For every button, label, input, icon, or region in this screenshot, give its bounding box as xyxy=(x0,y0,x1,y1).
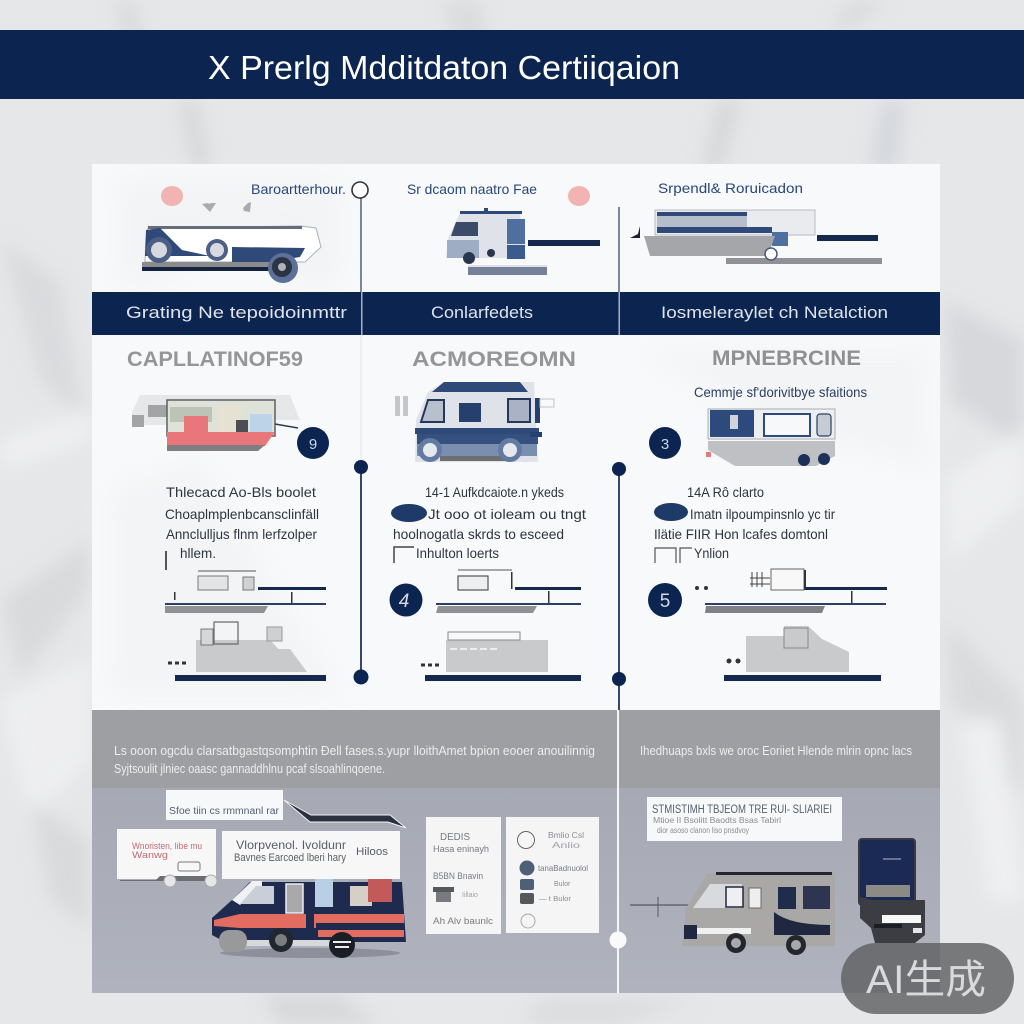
card D: legend: Hasa eninayh xyxy=(433,844,489,854)
icon: top vehicle 2 xyxy=(446,208,600,275)
chart: section 2 upper diagram xyxy=(436,570,581,613)
title banner xyxy=(0,30,1024,99)
text block: lower left note: Ls ooon ogcdu clarsatbgastqsomphtin Ɖell ƭases.s.yupr lloithAmet bpion eooer anouilinnig xyxy=(114,743,595,758)
column divider lines xyxy=(361,198,619,710)
text block: section 2: 14-1 Aufkdcaiote.n ykeds xyxy=(425,484,564,500)
label: strip column 2: Conlarfedets xyxy=(431,303,533,322)
heading: column 2 top: Sr dcaom naatro Fae xyxy=(407,181,537,197)
card D: legend xyxy=(426,817,501,934)
chart: section 3 lower diagram xyxy=(724,626,881,681)
heading: column 1 top: Baroartterhour. xyxy=(251,181,346,197)
text block: section 1: Choaplmplenbcansclinfäll xyxy=(165,506,319,522)
callout: card B: Wnoristen, Iibe mu xyxy=(132,841,202,851)
chart: section 1 lower diagram xyxy=(168,622,326,681)
callout: card F: Mtioe II Bsolitt Baodts Bsas Tabirl xyxy=(653,816,781,825)
card D: legend: B5BN Bnavin xyxy=(433,871,483,881)
navy label strip xyxy=(92,292,940,335)
text block: section 3: Ynlion xyxy=(694,545,729,561)
text block: section 2: Inhulton loerts xyxy=(416,545,499,561)
subheading: section 3: Cemmje sf'dorivitbye sfaitions xyxy=(694,384,867,400)
label: strip column 3: Iosmeleraylet ch Netalction xyxy=(661,303,888,322)
text block: lower left note xyxy=(114,743,595,776)
heading: section 1: CAPLLATINOF59 xyxy=(127,348,303,371)
number badge: 9: 9 xyxy=(309,436,317,453)
callout: card C: Vlorpvenol. Ivoldunr xyxy=(236,838,346,852)
icon: cutaway camper xyxy=(132,395,300,451)
label: strip column 1: Grating Ne tepoidoinmttr xyxy=(126,303,347,322)
panel: lower section xyxy=(92,710,940,993)
icon: black device xyxy=(859,839,925,943)
text block: section 3: 14A Rô clarto xyxy=(687,484,764,500)
callout: card B: Wanwg xyxy=(132,850,168,860)
chart: section 3 upper diagram xyxy=(695,569,887,613)
number badge: 3: 3 xyxy=(661,436,669,453)
callout: card B xyxy=(117,829,217,887)
callout: card C: Hiloos xyxy=(356,846,389,858)
text block: section 2 xyxy=(391,484,586,563)
card E: legend: — t Bulor xyxy=(539,896,572,903)
icon: pink marker left xyxy=(161,186,183,206)
callout: card F: dior asoso clanon liso pnsdvoy xyxy=(657,826,749,835)
callout: card F xyxy=(647,797,842,841)
timeline dots xyxy=(354,460,626,686)
text block: section 1 xyxy=(165,484,319,570)
icon: top vehicle 1 xyxy=(142,226,321,283)
text block: lower left note: Syjtsoulit jlniec oaasc gannaddhlnu pcaf slsoahlinqoene. xyxy=(114,761,385,776)
icon: top vehicle 3 xyxy=(630,210,882,264)
card E: legend: Bulor xyxy=(554,881,571,888)
title: X Prerlg Mdditdaton Certiiqaion xyxy=(208,49,680,86)
text block: section 1: hllem. xyxy=(180,545,216,561)
callout: card A xyxy=(166,790,283,820)
card E: legend: tanaBadnuolol xyxy=(538,864,588,873)
icon: van roof xyxy=(284,800,406,828)
timeline dot: lower xyxy=(610,932,626,948)
text block: section 2: hoolnogatla skrds to esceed xyxy=(393,526,564,542)
chart: section 2 lower diagram xyxy=(421,632,581,681)
card D: legend: DEDIS xyxy=(440,832,470,843)
icon: front camper van xyxy=(395,382,554,462)
number badge: 4 xyxy=(390,584,422,616)
number badge: 5: 5 xyxy=(660,591,670,612)
callout: card C: Bavnes Earcoed lberi hary xyxy=(234,852,346,864)
number badge: 5 xyxy=(648,583,682,617)
text block: section 3 xyxy=(654,484,835,563)
callout: card C xyxy=(222,831,400,879)
card E: legend: Bmlio Csl xyxy=(548,831,584,840)
badge: AI generated xyxy=(841,943,1014,1014)
number badge: 4: 4 xyxy=(399,591,409,612)
text block: lower right note: Ihedhuaps bxls we oroc Eoriiet Hlende mlrin opnc lacs xyxy=(640,743,912,758)
badge: AI generated: AI生成 xyxy=(866,958,986,1002)
icon: side camper xyxy=(706,409,835,466)
card E: legend xyxy=(506,817,599,933)
heading: section 2: ACMOREOMN xyxy=(412,348,576,371)
icon: red camper van xyxy=(212,879,406,958)
callout: card A: Sfoe tiin cs rmmnanl rar xyxy=(169,806,280,817)
card D: legend: Ah Alv baunlc xyxy=(433,916,494,926)
icon: grey camper van xyxy=(630,872,835,955)
heading: section 3: MPNEBRCINE xyxy=(712,347,861,370)
card D: legend: Iillaio xyxy=(462,892,478,899)
icon: pink marker right xyxy=(568,186,590,206)
heading: column 3 top: Srpendl& Roruicadon xyxy=(658,180,803,196)
text block: section 3: Ilätie FIIR Hon lcafes domtonl xyxy=(654,526,828,542)
number badge: 3 xyxy=(649,427,681,459)
text block: section 1: Annclulljus flnm lerfzolper xyxy=(166,526,317,542)
panel: main white card xyxy=(92,164,940,710)
text block: section 2: Jt ooo ot ioleam ou tngt xyxy=(428,506,586,522)
text block: section 3: Imatn ilpoumpinsnlo yc tir xyxy=(690,506,835,522)
card E: legend: Anlio xyxy=(552,841,581,850)
icon: header ring xyxy=(352,182,368,198)
text block: section 1: Thlecacd Ao-Bls boolet xyxy=(166,484,316,500)
lower divider line xyxy=(617,710,619,993)
number badge: 9 xyxy=(297,427,329,459)
callout: card F: STMISTIMH TBJEOM TRE RUI- SLIARIEI xyxy=(652,804,832,816)
icon: small grey hearts xyxy=(202,202,251,212)
chart: section 1 upper diagram xyxy=(165,571,326,613)
